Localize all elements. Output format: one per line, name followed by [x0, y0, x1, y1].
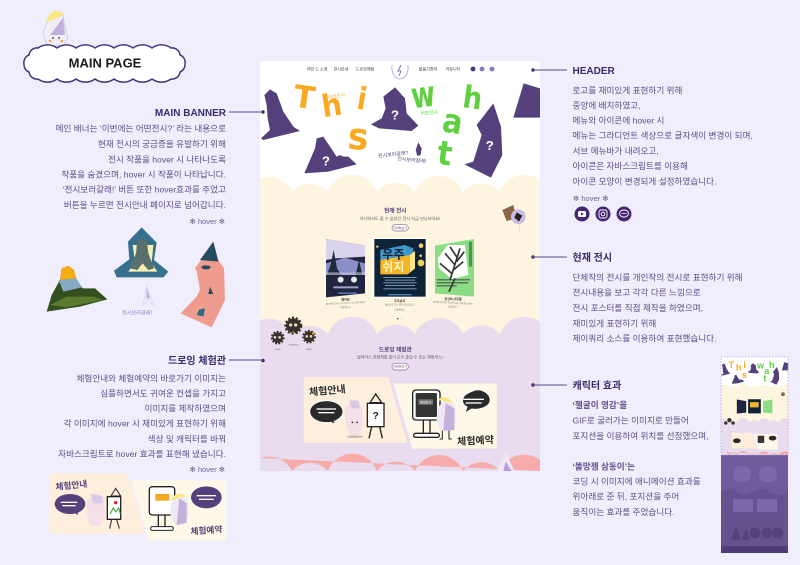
icon: bottle hat character	[502, 205, 526, 233]
icon: instagram	[596, 206, 610, 222]
text block: HEADER description: 중앙에 배치하였고,	[572, 100, 641, 110]
section: current exhibition: 자세히보기	[393, 225, 407, 230]
text block: HEADER description: 로고를 재미있게 표현하기 위해	[572, 84, 682, 96]
thumbnail: full page scroll preview: t	[763, 374, 766, 384]
text block: drawing experience description: 체험안내와 체험예약의 바로가기 이미지는	[77, 372, 226, 384]
card: experience guide: ?	[373, 411, 379, 422]
icon: soot sprites	[272, 318, 315, 350]
banner letters	[291, 74, 485, 174]
pink footer scallops	[260, 454, 540, 471]
text block: character effect description: ‘똘망젬 삼동이’는	[572, 460, 635, 472]
section: current exhibition: 어디에서도 볼 수 없었던 전시 지금 만나보아요!	[360, 215, 440, 221]
icon: chat	[616, 206, 632, 222]
text block: drawing experience description: ✻ hover ✻	[190, 465, 226, 474]
poster: center: 우주	[382, 247, 404, 261]
banner button: 전시보러갈래!	[397, 155, 426, 165]
text block: character effect description: 포지션을 이용하여 위치를 선정했으며,	[572, 430, 709, 441]
text block: character effect description	[572, 379, 709, 517]
text block: drawing experience description: 드로잉 체험관	[168, 354, 226, 367]
card: reservation hover	[131, 480, 226, 541]
artwork: volcano	[47, 266, 107, 312]
card: experience guide: 체험안내	[308, 382, 346, 399]
thumbnail: full page scroll preview: s	[742, 370, 747, 380]
poster: center: 쉬지	[382, 260, 404, 274]
main banner	[261, 74, 540, 178]
main banner: 어떤전시	[327, 92, 345, 101]
thumbnail: full page scroll preview: h	[769, 360, 775, 370]
section: drawing experience	[304, 345, 514, 471]
text block: MAIN BANNER description	[56, 108, 227, 226]
text block: character effect description: GIF로 굴러가는 이미지로 만들어	[572, 416, 689, 426]
text block: HEADER description: HEADER	[572, 66, 616, 77]
poster: center: 우주쉬지	[394, 298, 405, 303]
icons: header hover icons	[574, 206, 632, 222]
title: MAIN PAGE cloud badge: MAIN PAGE	[69, 56, 142, 70]
poster: left: 자세히보기	[340, 305, 351, 309]
section: drawing experience: 자세히보기	[393, 364, 407, 369]
banner letters: T	[291, 79, 317, 117]
header navigation: 커뮤니티	[446, 66, 461, 72]
card: experience reservation	[393, 383, 497, 449]
poster: center	[373, 238, 427, 311]
text block: MAIN BANNER description: 버튼을 누르면 전시안내 페이지로 넘어갑니다.	[64, 199, 226, 210]
text block: current exhibition description: 재미있게 표현하기 위해	[572, 318, 656, 328]
banner letters: w	[409, 74, 438, 117]
card: experience guide	[304, 377, 407, 443]
text block: drawing experience description: 자바스크립트로 hover 효과를 표현해 냈습니다.	[58, 449, 226, 459]
text block: drawing experience description	[58, 354, 226, 474]
banner letters: s	[346, 115, 370, 159]
main banner: ?	[486, 138, 494, 153]
text block: drawing experience description: 각 이미지에 hover 시 재미있게 표현하기 위해	[64, 418, 226, 428]
section: drawing experience: 달려라스 전형체험 없이 모두 즐길 수 있는 체험부스!	[357, 353, 443, 359]
text block: character effect description: ‘젤굴이 영감’을	[572, 399, 627, 410]
text block: character effect description: 코딩 시 이미지에 애니메이션 효과를	[572, 476, 701, 486]
header navigation: 전시안내	[334, 66, 349, 72]
banner silhouette artworks	[261, 83, 540, 178]
poster: center: 자세히보기	[394, 307, 405, 311]
text block: current exhibition description: 현재 전시	[572, 251, 612, 264]
hover artworks for main banner	[47, 227, 225, 327]
lilac drawing experience section	[260, 317, 540, 471]
connector: character effect	[531, 383, 567, 387]
text block: MAIN BANNER description: ‘전시보러갈래!’ 버튼 또한 hover효과를 주었고	[63, 184, 226, 194]
icon: crystal character peeking above cloud	[43, 11, 68, 46]
text block: MAIN BANNER description: MAIN BANNER	[155, 108, 227, 119]
text block: MAIN BANNER description: 전시 작품을 hover 시 나타나도록	[108, 154, 226, 164]
card: experience reservation: 체험예약	[457, 433, 494, 448]
text block: HEADER description: 메뉴와 아이콘에 hover 시	[572, 114, 664, 126]
banner letters: a	[440, 102, 466, 143]
main banner: ?	[391, 108, 399, 123]
hover images for drawing experience	[49, 473, 226, 541]
text block: HEADER description: 아이콘은 자바스크립트를 이용해	[572, 161, 688, 171]
text block: HEADER description: ✻ hover ✻	[573, 194, 609, 203]
connector: header	[531, 68, 567, 72]
text block: current exhibition description: 전시 포스터를 직접 제작을 하였으며,	[572, 302, 703, 313]
connector: main banner	[229, 110, 265, 114]
text block: drawing experience description: 이미지를 제작하였으며	[145, 404, 226, 414]
thumbnail: full page scroll preview: w	[756, 361, 765, 371]
text block: HEADER description	[572, 66, 753, 203]
text block: MAIN BANNER description: 현재 전시의 궁금증을 유발하기 위해	[98, 139, 226, 149]
connector: current exhibition	[531, 255, 567, 259]
text block: MAIN BANNER description: 작품을 숨겼으며, hover 시 작품이 나타납니다.	[61, 168, 226, 180]
thumbnail: full page scroll preview: a	[764, 366, 770, 376]
thumbnail: full page scroll preview: i	[743, 360, 746, 370]
header navigation: 드로잉체험	[356, 66, 375, 72]
poster: right: 자세히보기	[448, 305, 458, 309]
card: reservation hover: 체험예약	[190, 523, 223, 536]
banner button hover: 전시보러갈래!	[122, 309, 152, 317]
text block: HEADER description: 서브 메뉴바가 내려오고,	[572, 145, 659, 156]
poster: left	[326, 239, 366, 309]
card: guide hover: 체험안내	[55, 478, 88, 492]
card: guide hover	[49, 473, 145, 533]
poster: right: 환경이 변화로 세계에 남은 식물을 보세요	[433, 300, 474, 306]
icon: crystal character on footer	[497, 452, 514, 471]
text block: current exhibition description: 단체작의 전시를 개인작의 전시로 표현하기 위해	[572, 272, 743, 282]
text block: current exhibition description: 전시내용을 보고 각각 다른 느낌으로	[572, 286, 701, 298]
carousel dots	[397, 318, 403, 319]
main banner: ?	[322, 153, 330, 168]
thumbnail: full page scroll preview: T	[729, 360, 735, 370]
poster: left: 페이퍼로 만든 전시입니다 보고 즐기세요	[326, 300, 366, 306]
text block: current exhibition description	[572, 251, 743, 344]
banner letters: i	[354, 80, 370, 117]
title: MAIN PAGE cloud badge	[24, 11, 185, 82]
connector: drawing experience	[229, 359, 265, 362]
poster: right: 환경의 산유물	[444, 296, 462, 301]
banner button	[378, 142, 426, 165]
text block: drawing experience description: 색상 및 캐릭터를 바꿔	[148, 433, 226, 444]
poster: center: 예비과학 하기 좋은 전시입니다	[385, 303, 415, 307]
poster: right	[433, 239, 474, 309]
banner letters: h	[319, 86, 344, 125]
text block: HEADER description: 아이콘 모양이 변경되게 설정하였습니다.	[572, 176, 716, 186]
section: drawing experience: 드로잉 체험관	[379, 345, 413, 353]
banner button hover	[122, 286, 154, 317]
cream exhibition section	[260, 175, 540, 345]
header navigation	[307, 65, 494, 79]
text block: current exhibition description: 제이쿼리 소스를 이용하여 표현했습니다.	[572, 332, 716, 344]
artwork: teal temple	[114, 227, 168, 277]
text block: MAIN BANNER description: ✻ hover ✻	[190, 217, 226, 226]
main banner: 어떤전시	[420, 109, 438, 117]
thumbnail: full page scroll preview	[721, 357, 788, 553]
card: experience reservation: 예약하기	[420, 399, 431, 404]
thumbnail: full page scroll preview: h	[736, 363, 741, 373]
header navigation: 어떤 드 소개	[307, 66, 328, 72]
banner letters: t	[435, 133, 455, 174]
artwork: pink figure	[181, 242, 225, 327]
banner letters: h	[461, 79, 485, 117]
banner button: 전시보러갈래?	[378, 149, 409, 160]
poster: left: 페이퍼	[341, 296, 350, 301]
section: current exhibition: 현재 전시	[384, 207, 407, 215]
text block: character effect description: 캐릭터 효과	[572, 379, 621, 392]
section: current exhibition	[272, 205, 526, 350]
text block: character effect description: 움직이는 효과를 주었습니다.	[572, 506, 675, 517]
text block: drawing experience description: 심플하면서도 귀여운 컨셉을 가지고	[100, 388, 226, 398]
icon: youtube	[574, 206, 590, 222]
panel: website main page mockup	[260, 61, 540, 471]
text block: HEADER description: 메뉴는 그라디언트 색상으로 글자색이 변경이 되며,	[572, 130, 753, 140]
text block: character effect description: 위아래로 준 뒤, 포지션을 주어	[572, 490, 679, 502]
text block: MAIN BANNER description: 메인 배너는 ‘이번에는 어떤전시?’ 라는 내용으로	[56, 124, 226, 134]
header navigation: 물품기증처	[419, 66, 438, 72]
